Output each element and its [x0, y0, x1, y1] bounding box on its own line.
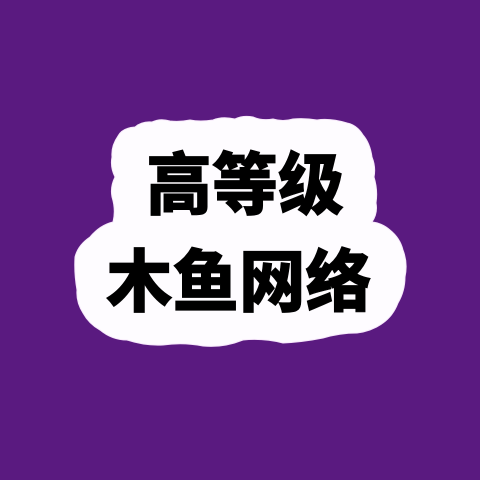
white cloud-shaped label: [75, 116, 406, 346]
heading line 2: 木鱼网络: [106, 245, 372, 321]
heading line 1: 高等级: [146, 148, 344, 224]
